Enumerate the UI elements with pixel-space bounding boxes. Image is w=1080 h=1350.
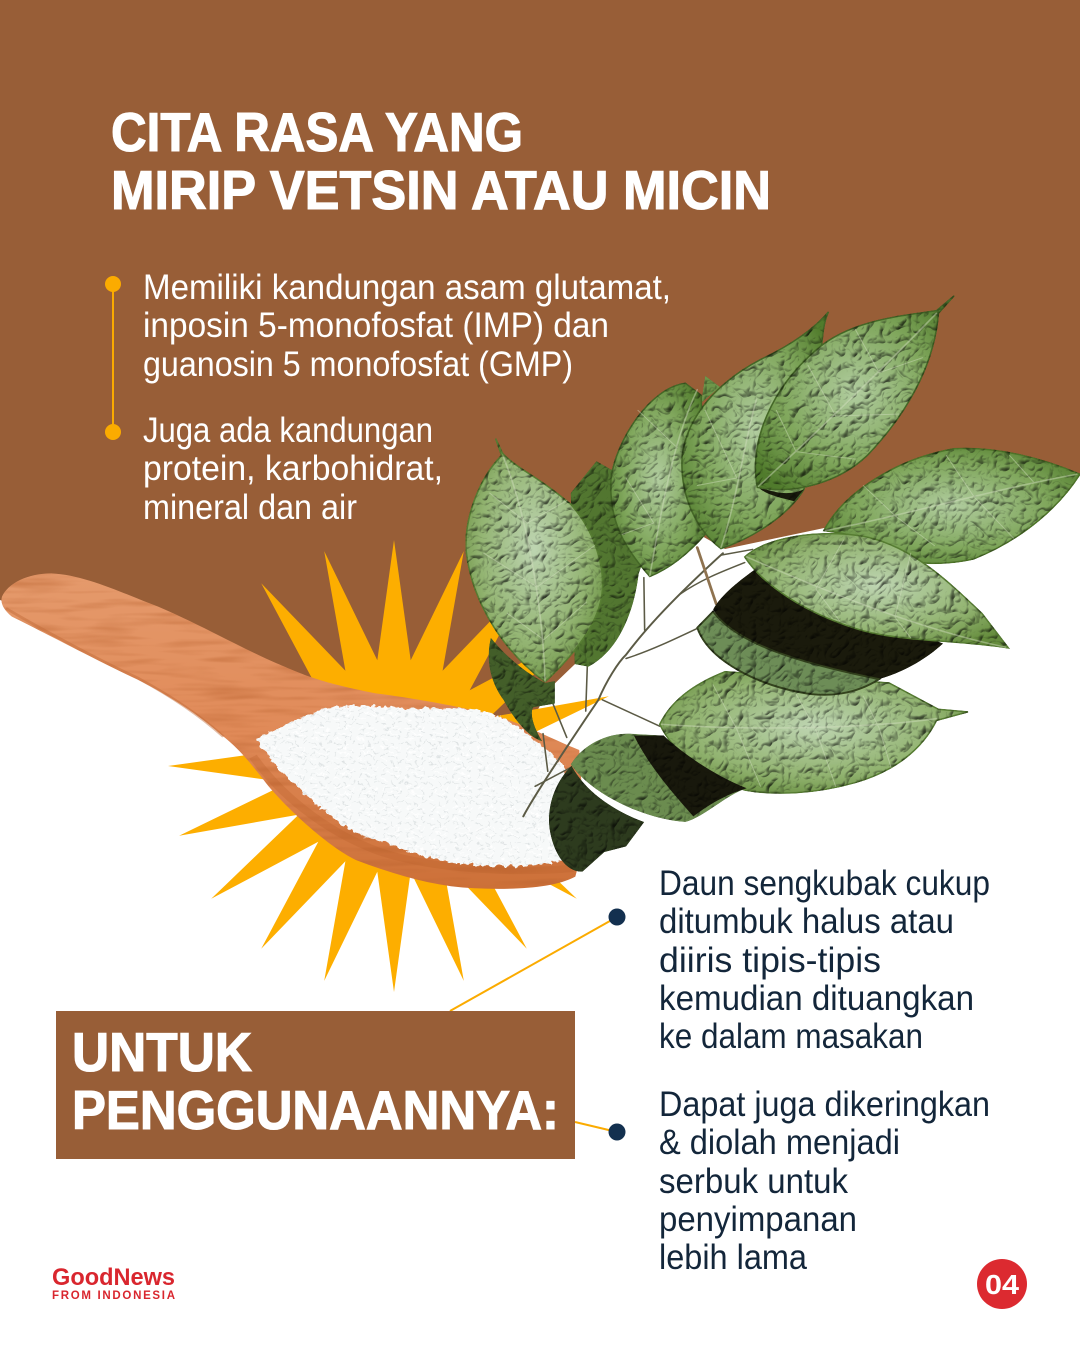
- leaf: bottom big: [660, 672, 968, 793]
- brown background panel: [0, 0, 1080, 745]
- panel: usage heading: PENGGUNAANNYA:: [72, 1079, 559, 1141]
- leaf: right: [824, 448, 1080, 563]
- logo: GoodNews from Indonesia: GoodNews: [52, 1264, 175, 1291]
- page number badge: [977, 1259, 1027, 1309]
- darker handle underside: [6, 608, 223, 737]
- wooden spoon with salt: [1, 573, 585, 889]
- bullet text: glutamate content: Memiliki kandungan asam glutamat,: [143, 268, 671, 307]
- dot marker: first usage point: [608, 908, 626, 926]
- connector line to second usage point: [575, 1122, 617, 1132]
- icon: orange sunburst: [168, 540, 620, 992]
- leaf: dark shadow side: [713, 568, 943, 679]
- bullet text: other content: [143, 411, 443, 527]
- usage text: dried into powder: [659, 1085, 990, 1277]
- leaf veins: [484, 313, 1077, 786]
- leaf: big left: [466, 439, 603, 682]
- usage text: dried into powder: & diolah menjadi: [659, 1123, 900, 1162]
- bullet text: glutamate content: [143, 268, 671, 384]
- usage text: ground or sliced: [659, 864, 990, 1056]
- panel: usage heading: [56, 1011, 575, 1159]
- salt crystals: [257, 706, 565, 866]
- usage text: dried into powder: lebih lama: [659, 1238, 807, 1277]
- bullet text: glutamate content: inposin 5-monofosfat (IMP) dan: [143, 306, 609, 345]
- usage text: ground or sliced: diiris tipis-tipis: [659, 941, 881, 980]
- leaf shadow under top leaf: [757, 486, 804, 501]
- bullet text: glutamate content: guanosin 5 monofosfat (GMP): [143, 345, 573, 384]
- leaf: dark underside left: [489, 638, 555, 741]
- dot marker: second usage point: [608, 1124, 626, 1140]
- darker bowl rim: [253, 757, 573, 870]
- usage text: dried into powder: Dapat juga dikeringkan: [659, 1085, 990, 1124]
- bullet timeline connector: [105, 276, 121, 440]
- spoon body: [1, 573, 585, 889]
- title: MIRIP VETSIN ATAU MICIN: [111, 159, 771, 221]
- title: [111, 101, 771, 221]
- leaf: upper centre: [682, 312, 829, 549]
- leaf: upper middle: [611, 383, 705, 577]
- leaf: lowest dark: [549, 766, 644, 872]
- leaf: lower left green: [571, 734, 747, 822]
- usage text: ground or sliced: ke dalam masakan: [659, 1017, 923, 1056]
- title: CITA RASA YANG: [111, 101, 523, 163]
- leaf: small tip: [701, 376, 720, 403]
- leaves branch: [466, 296, 1080, 872]
- leaf: middle right: [745, 534, 1008, 648]
- bullet text: other content: protein, karbohidrat,: [143, 449, 443, 488]
- usage text: dried into powder: serbuk untuk: [659, 1162, 848, 1201]
- panel: usage heading: UNTUK: [72, 1021, 252, 1083]
- usage text: ground or sliced: ditumbuk halus atau: [659, 902, 954, 941]
- usage text: ground or sliced: Daun sengkubak cukup: [659, 864, 990, 903]
- usage text: ground or sliced: kemudian dituangkan: [659, 979, 974, 1018]
- connector line to first usage point: [450, 917, 617, 1011]
- leaf: lower left shadow: [634, 736, 747, 816]
- logo: GoodNews from Indonesia: FROM INDONESIA: [52, 1290, 175, 1302]
- bullet text: other content: mineral dan air: [143, 488, 357, 527]
- leaf: top right big: [756, 296, 954, 489]
- leaf: underside crossing: [697, 611, 879, 695]
- bullet text: other content: Juga ada kandungan: [143, 411, 433, 450]
- leaf textures group: [466, 296, 1080, 872]
- leaf: dark behind left: [571, 461, 646, 667]
- usage text: dried into powder: penyimpanan: [659, 1200, 857, 1239]
- stems: [523, 548, 753, 816]
- page number badge: 04: [985, 1269, 1019, 1300]
